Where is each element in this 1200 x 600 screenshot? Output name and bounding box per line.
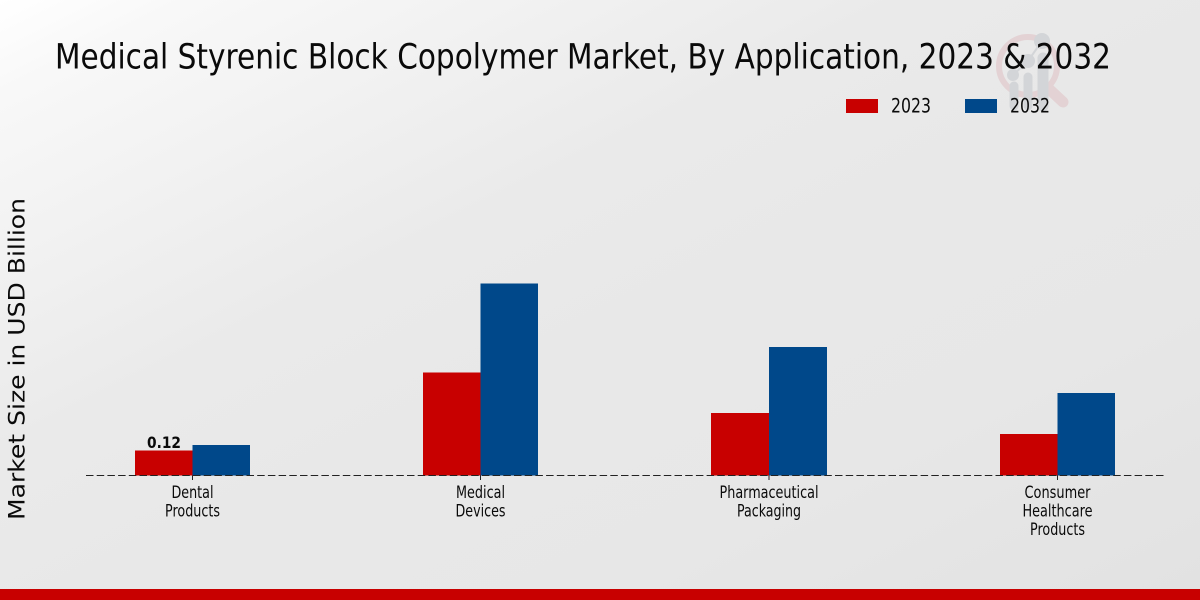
legend label: 2023: 2023	[891, 94, 931, 118]
x-axis label: Pharmaceutical Packaging	[720, 483, 818, 520]
group: Pharmaceutical Packaging	[711, 347, 827, 476]
group: Dental Products	[135, 433, 250, 476]
bar: Pharmaceutical Packaging 2023	[711, 413, 769, 476]
legend	[846, 94, 1050, 118]
x-axis label: Consumer Healthcare Products: Products	[1030, 520, 1085, 539]
x-axis label: Medical Devices	[456, 483, 506, 520]
value label: 0.12	[147, 433, 181, 452]
x-axis label: Dental Products: Products	[165, 502, 220, 520]
x-axis label: Pharmaceutical Packaging: Pharmaceutical	[720, 483, 818, 502]
legend swatch: 2023	[846, 99, 878, 113]
x-axis baseline	[86, 476, 1164, 480]
x-axis label: Dental Products	[165, 483, 220, 520]
bar: Dental Products 2032	[192, 445, 250, 476]
bar: Medical Devices 2023	[423, 372, 480, 476]
x-axis label: Medical Devices: Devices	[456, 502, 506, 520]
x-axis label: Medical Devices: Medical	[456, 483, 505, 502]
bar: Medical Devices 2032	[480, 284, 538, 476]
group: Consumer Healthcare Products	[1000, 393, 1115, 476]
legend swatch: 2032	[965, 99, 997, 113]
x-axis label: Consumer Healthcare Products: Consumer	[1024, 483, 1091, 502]
x-axis label: Dental Products: Dental	[172, 483, 214, 502]
bar: Consumer Healthcare Products 2023	[1000, 434, 1058, 476]
group: Medical Devices	[423, 284, 538, 476]
x-axis label: Consumer Healthcare Products	[1022, 483, 1092, 539]
bar chart	[135, 284, 1115, 476]
x-axis label: Consumer Healthcare Products: Healthcare	[1022, 502, 1092, 520]
bar: Consumer Healthcare Products 2032	[1058, 393, 1115, 476]
x-axis label: Pharmaceutical Packaging: Packaging	[737, 502, 801, 520]
icon: watermark logo	[999, 33, 1063, 106]
bar: Dental Products 2023	[135, 450, 192, 476]
y-axis title: Market Size in USD Billion	[4, 198, 30, 520]
legend label: 2032: 2032	[1010, 94, 1050, 118]
footer bar	[0, 589, 1200, 600]
bar: Pharmaceutical Packaging 2032	[769, 347, 827, 476]
